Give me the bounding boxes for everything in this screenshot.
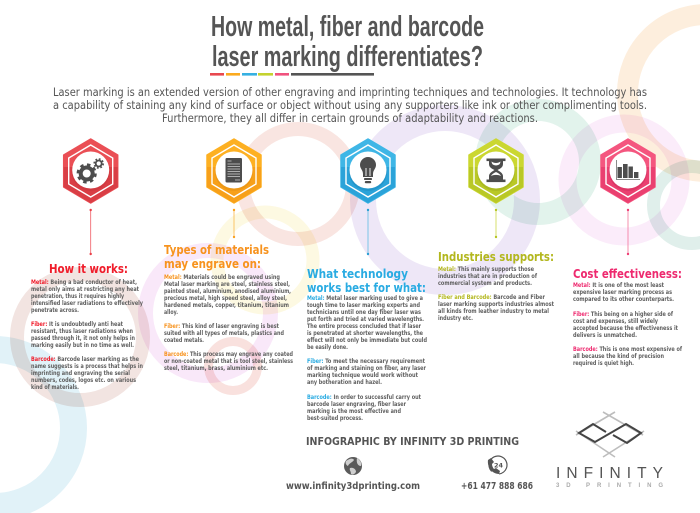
text block: fiber and barcode: all kinds from leather industry to metal: [438, 309, 549, 315]
text block: fiber and barcode: laser marking supports industries almost: [438, 302, 554, 308]
phone number: +61 477 888 686: [461, 481, 533, 492]
text block: barcode: numbers, codes, logos etc. on various: [31, 378, 137, 384]
text block: metal: penetration, thus it requires highly: [31, 294, 124, 300]
panel: cost effectiveness: [573, 267, 682, 367]
text block: metal: painted steel, aluminium, anodised aluminium,: [164, 289, 291, 295]
text block: metal: Metal: Metal laser marking used to give a: [307, 296, 423, 302]
text block: fiber: accepted because the effectiveness it: [573, 326, 678, 332]
arrow: pink stem: [627, 209, 629, 255]
text block: barcode: [31, 357, 143, 391]
text block: metal: The entire process concluded that if laser: [307, 324, 421, 330]
text block: fiber and barcode: industry etc.: [438, 316, 473, 322]
heading: what technology: works best for what:: [307, 281, 426, 295]
text block: barcode: kind of materials.: [31, 385, 79, 391]
text block: metal: [438, 267, 537, 287]
text block: barcode: Barcode: In order to successful carry out: [307, 395, 421, 401]
heading: how it works: How it works:: [49, 262, 128, 276]
text block: metal: [31, 280, 143, 314]
text block: fiber: marking technique would work without: [307, 373, 418, 379]
text block: metal: be easily done.: [307, 345, 348, 351]
heading: types of materials: may engrave on:: [164, 257, 261, 271]
icon: 24 hour phone: [486, 453, 510, 477]
logo: infinity 3d printing: [556, 412, 663, 489]
icon: globe: [344, 457, 362, 475]
text block: fiber: Fiber: To meet the necessary requirement: [307, 359, 425, 365]
icon: bar chart in pink hexagon: [601, 139, 655, 203]
text block: fiber: Fiber: This being on a higher side of: [573, 312, 673, 318]
text block: barcode: Barcode: This is one most expensive of: [573, 347, 682, 353]
heading: types of materials: [164, 243, 269, 271]
text block: barcode: steel, titanium, brass, aluminium etc.: [164, 366, 268, 372]
text block: metal: precious metal, high speed steel, alloy steel,: [164, 296, 287, 302]
text block: metal: industries that are in production of: [438, 274, 537, 280]
text block: metal: technicians until one day fiber laser was: [307, 310, 422, 316]
heading: what technology: [307, 267, 426, 295]
text block: metal: compared to its other counterparts.: [573, 297, 674, 303]
text block: metal: tough time to laser marking experts and: [307, 303, 420, 309]
text block: metal: Metal: Materials could be engraved using: [164, 275, 280, 281]
text block: barcode: required is quiet high.: [573, 361, 634, 367]
text block: barcode: barcode laser engraving, fiber laser: [307, 402, 406, 408]
text block: fiber: of marking and staining on fiber, any laser: [307, 366, 426, 372]
text block: barcode: name suggests is a process that helps in: [31, 364, 143, 370]
text block: barcode: marking is the most effective and: [307, 409, 401, 415]
text block: barcode: [307, 395, 421, 422]
logo wordmark: INFINITY: [556, 465, 663, 482]
text block: fiber: suited with all types of metals, plastics and: [164, 331, 284, 337]
text block: fiber and barcode: [438, 295, 554, 322]
text block: fiber: [164, 324, 284, 344]
text block: barcode: all because the kind of precision: [573, 354, 664, 360]
text block: fiber: Fiber: It is undoubtedly anti heat: [31, 322, 123, 328]
arrow: green stem: [495, 209, 497, 238]
text block: metal: intensified laser radiations to effectively: [31, 301, 143, 307]
text block: metal: hardened metals, copper, titanium, titanium: [164, 303, 289, 309]
text block: metal: alloy.: [164, 310, 178, 316]
icon: light bulb in blue hexagon: [341, 139, 395, 203]
text block: barcode: best-suited process.: [307, 416, 363, 422]
text block: fiber: delivers is unmatched.: [573, 333, 637, 339]
icon: gears in red hexagon: [64, 139, 118, 203]
footer heading: INFOGRAPHIC BY INFINITY 3D PRINTING: [306, 436, 519, 448]
heading: industries supports: Industries supports:: [438, 250, 554, 264]
heading: cost effectiveness: Cost effectiveness:: [573, 267, 682, 281]
text block: metal: [164, 275, 291, 316]
website: www.infinity3dprinting.com: [286, 481, 420, 492]
text block: metal: effect will not only be immediate but could: [307, 338, 427, 344]
text block: fiber: marking easily but in no time as well.: [31, 343, 134, 349]
text block: fiber: resistant, thus laser radiations when: [31, 329, 133, 335]
icon: document in orange hexagon: [207, 139, 261, 203]
heading: types of materials: Types of materials: [164, 243, 269, 257]
text block: fiber: any botheration and hazel.: [307, 380, 382, 386]
panel: how it works: [31, 262, 143, 391]
text block: metal: [573, 283, 674, 303]
arrow: orange stem: [233, 209, 235, 238]
panel: types of materials: [164, 243, 294, 372]
text block: fiber: [307, 359, 426, 386]
title: [211, 11, 484, 73]
icon: 24 hour phone: 24: [494, 462, 503, 470]
icon: hourglass in green hexagon: [469, 139, 523, 203]
title underline colour bars: [210, 73, 374, 76]
arrow: blue stem: [367, 209, 369, 255]
text block: metal: penetrate across.: [31, 308, 79, 314]
text block: metal: metal only aims at restricting any heat: [31, 287, 139, 293]
text block: barcode: [573, 347, 682, 367]
arrow: red stem: [90, 209, 92, 255]
text block: fiber: Fiber: This kind of laser engraving is best: [164, 324, 279, 330]
title: laser marking differentiates?: [212, 41, 483, 73]
logo tagline: 3D PRINTING: [556, 483, 663, 489]
text block: fiber: [31, 322, 135, 349]
panel: industries supports: [438, 250, 554, 322]
text block: metal: Metal: It is one of the most least: [573, 283, 664, 289]
text block: fiber: passed through it, it not only helps in: [31, 336, 135, 342]
text block: fiber: coated metals.: [164, 338, 204, 344]
text block: barcode: or non-coated metal that is tool steel, stainless: [164, 359, 294, 365]
text block: metal: Metal: Being a bad conductor of heat,: [31, 280, 137, 286]
text block: fiber and barcode: Fiber and Barcode: Barcode and Fiber: [438, 295, 545, 301]
text block: barcode: Barcode: Barcode laser marking as the: [31, 357, 139, 363]
text block: metal: expensive laser marking process as: [573, 290, 673, 296]
panel: what technology works best: [307, 267, 427, 422]
title: How metal, fiber and barcode: [211, 11, 484, 43]
text block: metal: is penetrated at shorter wavelengths, the: [307, 331, 423, 337]
text block: metal: put forth and tried at varied wavelengths.: [307, 317, 424, 323]
intro paragraph: [53, 85, 647, 125]
text block: metal: commercial system and products.: [438, 281, 532, 287]
text block: barcode: imprinting and engraving the serial: [31, 371, 130, 377]
text block: metal: Metal laser marking are steel, stainless steel,: [164, 282, 290, 288]
text block: barcode: [164, 352, 294, 372]
text block: fiber: [573, 312, 678, 339]
text block: metal: Metal: This mainly supports those: [438, 267, 534, 273]
text block: barcode: Barcode: This process may engrave any coated: [164, 352, 293, 358]
intro paragraph: Furthermore, they all differ in certain grounds of adaptability and reactions.: [162, 111, 538, 125]
heading: what technology: What technology: [307, 267, 408, 281]
text block: metal: [307, 296, 427, 351]
text block: fiber: cost and expenses, still widely: [573, 319, 658, 325]
logo mark: [576, 412, 644, 457]
